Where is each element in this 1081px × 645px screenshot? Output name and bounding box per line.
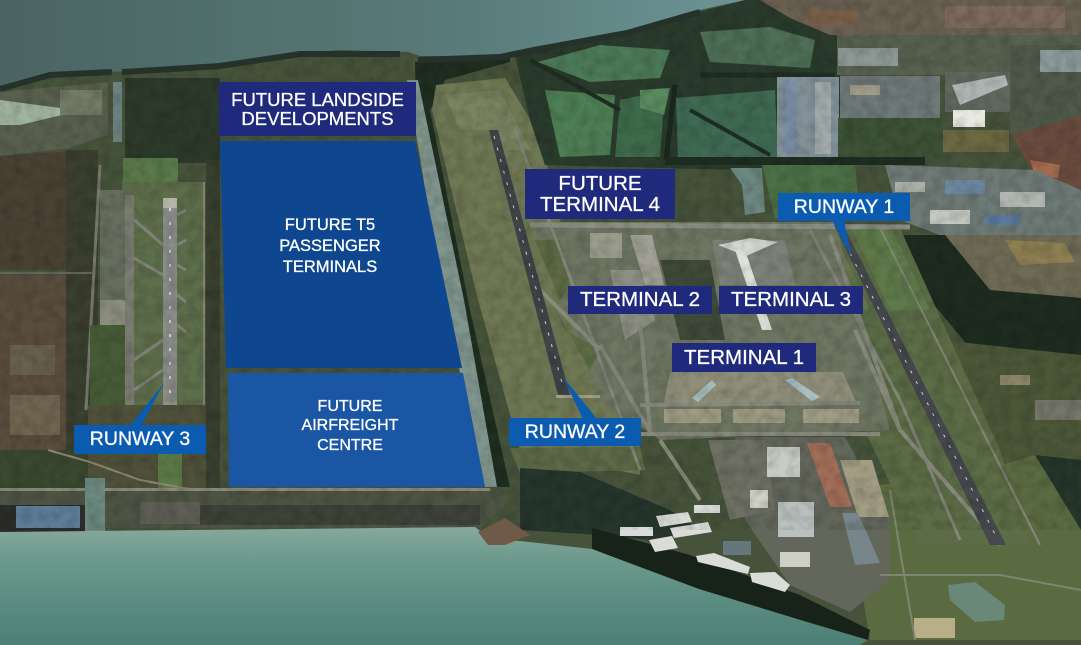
label: future airfreight centre: FUTURE bbox=[318, 398, 382, 415]
terminal green infield bbox=[535, 240, 570, 300]
north-east suburbs bbox=[760, 0, 1081, 40]
west forest bbox=[125, 78, 220, 163]
label: runway 2 bbox=[509, 418, 641, 446]
label: future T5 passenger terminals bbox=[279, 216, 381, 276]
taxiways bbox=[540, 235, 1000, 545]
label: runway 3 bbox=[74, 425, 206, 454]
eastern forest bbox=[895, 235, 1081, 360]
label: runway 3: RUNWAY 3 bbox=[90, 428, 190, 450]
label: future airfreight centre bbox=[301, 398, 398, 454]
construction zone bbox=[945, 235, 1081, 298]
south coast forest bbox=[520, 468, 700, 540]
south-west scrub bbox=[88, 405, 206, 490]
label: terminal 1: TERMINAL 1 bbox=[684, 346, 804, 368]
remote aprons bbox=[664, 409, 721, 423]
taxiway stubs bbox=[134, 210, 186, 390]
hangars bbox=[620, 505, 790, 592]
label: terminal 1 bbox=[672, 343, 816, 372]
label: terminal 3 bbox=[719, 286, 863, 314]
label: future airfreight centre: AIRFREIGHT bbox=[302, 417, 398, 434]
south-east grass bbox=[860, 455, 1081, 640]
panels: future development zones bbox=[220, 141, 485, 487]
label: runway 2: RUNWAY 2 bbox=[525, 420, 625, 442]
label: runway 1 bbox=[778, 193, 910, 221]
label: future terminal 4: TERMINAL 4 bbox=[540, 193, 660, 216]
runway 1 infield grass bbox=[810, 228, 1030, 545]
label: future T5 passenger terminals: TERMINALS bbox=[283, 258, 377, 276]
label: runway 1: RUNWAY 1 bbox=[794, 196, 894, 218]
label: terminal 2 bbox=[568, 286, 712, 314]
coastal tree band bbox=[0, 12, 700, 89]
aprons bbox=[590, 233, 622, 258]
west brown fields bbox=[0, 150, 85, 270]
beige pad bbox=[914, 618, 955, 638]
south-east lake bbox=[948, 582, 1005, 622]
label: future T5 passenger terminals: PASSENGER bbox=[279, 236, 381, 254]
south sea bbox=[0, 527, 868, 645]
forest east of canal bbox=[415, 55, 510, 487]
terminal complex ground bbox=[530, 222, 890, 440]
golf course forest background bbox=[515, 0, 840, 170]
west canal bbox=[113, 82, 122, 142]
leader wedge: runway 1 bbox=[832, 220, 851, 256]
runway 2 strip bbox=[489, 130, 570, 395]
runway 2 airfield grass bbox=[432, 78, 640, 475]
north strait water bbox=[0, 0, 745, 87]
label: terminal 2: TERMINAL 2 bbox=[580, 288, 700, 311]
label: future terminal 4 bbox=[525, 169, 675, 219]
tree band under golf bbox=[665, 157, 925, 165]
label: terminal 3: TERMINAL 3 bbox=[731, 288, 851, 311]
south road strip bbox=[0, 488, 510, 528]
zone: future airfreight centre bbox=[228, 373, 485, 487]
golf courses bbox=[538, 45, 670, 82]
peninsula jetty bbox=[478, 518, 530, 545]
warehouses east of runway 1 bbox=[885, 165, 1081, 235]
runway 1 strip bbox=[834, 225, 1006, 545]
eastern scrub bbox=[940, 340, 1081, 470]
leader wedge: runway 3 bbox=[130, 383, 164, 426]
runway 3 airfield bbox=[123, 158, 178, 182]
zone: future T5 passenger terminals bbox=[220, 141, 462, 368]
canal bbox=[407, 80, 497, 487]
label: future landside developments: FUTURE LANDSIDE bbox=[231, 89, 404, 110]
label: future airfreight centre: CENTRE bbox=[317, 437, 383, 454]
label: future terminal 4: FUTURE bbox=[558, 172, 642, 195]
terminal 1 aprons bbox=[664, 372, 856, 403]
label: future landside developments bbox=[219, 82, 416, 136]
taxiway around lake bbox=[880, 490, 1081, 640]
cargo complex bbox=[735, 437, 890, 612]
leader wedge: runway 2 bbox=[563, 377, 597, 419]
label: future landside developments: DEVELOPMENTS bbox=[241, 108, 394, 129]
label: future T5 passenger terminals: FUTURE T5 bbox=[285, 216, 375, 234]
parallel taxiway of runway 2 bbox=[515, 130, 640, 470]
west industrial patch bbox=[0, 82, 108, 156]
runway 3 strip bbox=[163, 198, 177, 406]
